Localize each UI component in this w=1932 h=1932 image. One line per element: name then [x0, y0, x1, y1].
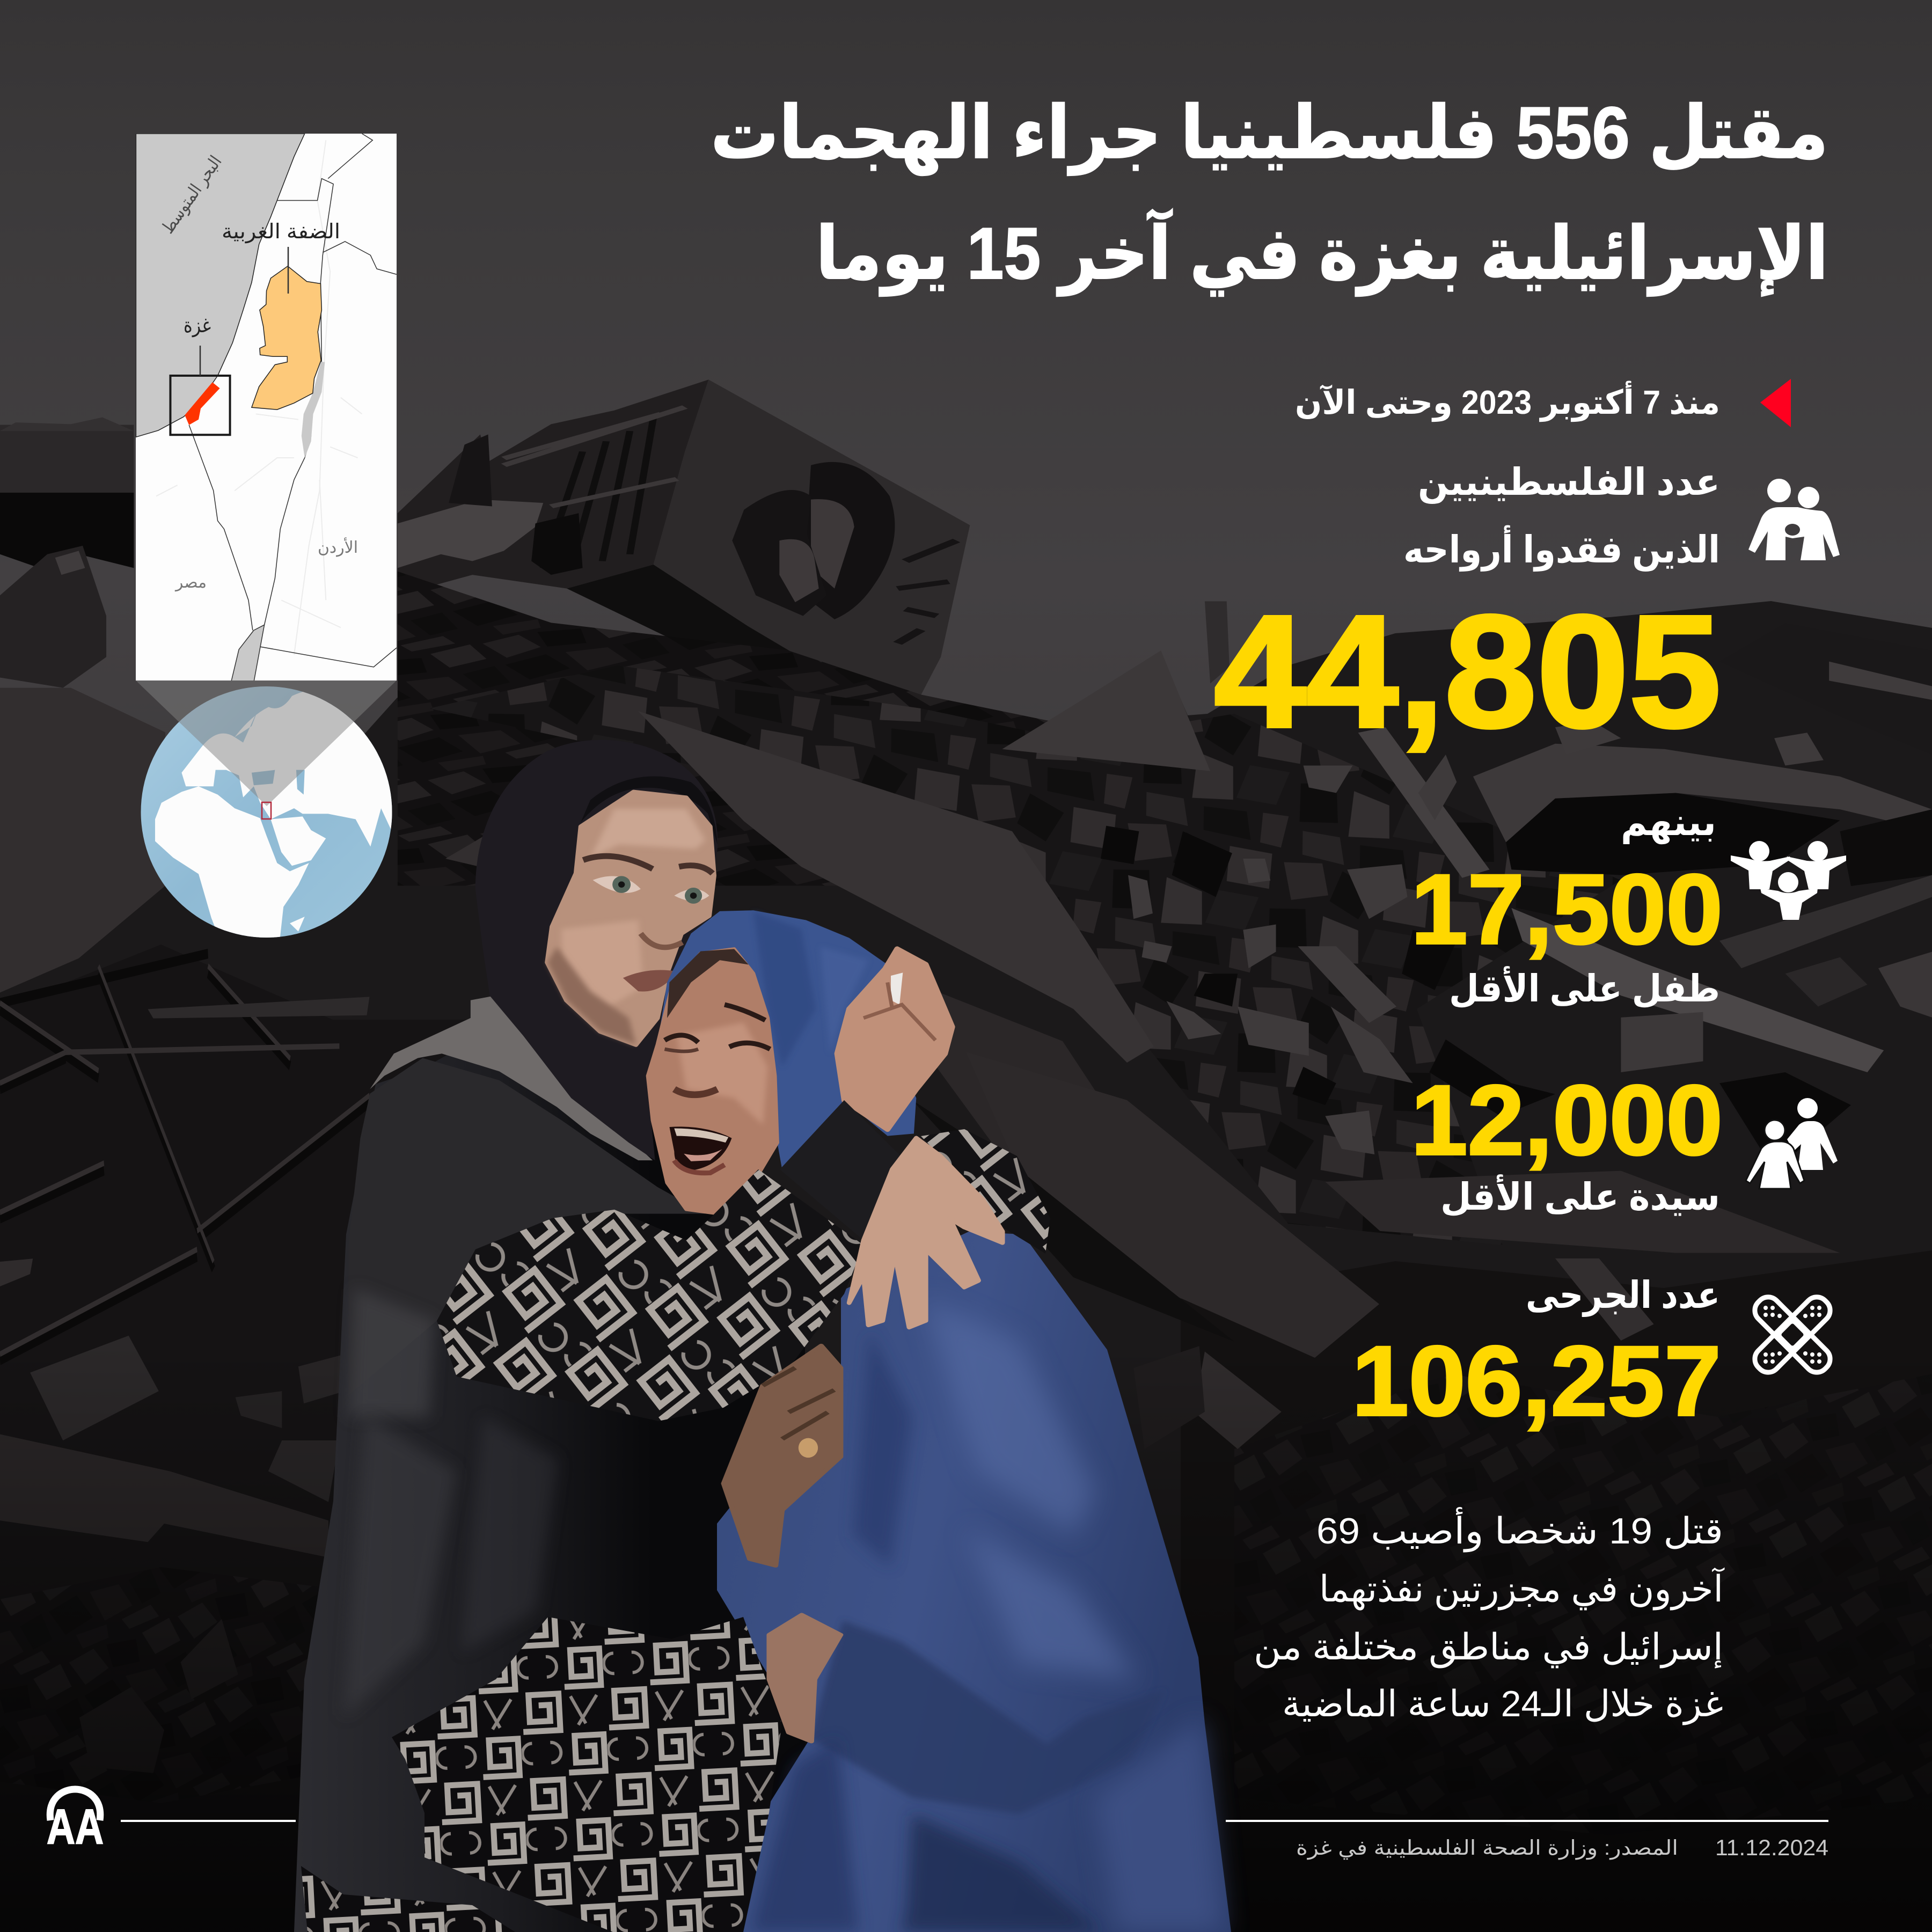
rubble fields	[429, 665, 1621, 1245]
map label: gaza: غزة	[184, 314, 211, 338]
photo: two women embracing	[294, 740, 1231, 1932]
tilted building with mural	[398, 379, 970, 701]
paragraph: last 24 hours: آخرون في مجزرتين نفذتهما	[1319, 1567, 1725, 1611]
locator rectangle	[262, 802, 271, 819]
map inset	[136, 134, 397, 682]
date range text: منذ 7 أكتوبر 2023 وحتى الآن	[1295, 380, 1720, 422]
sleeve pattern upper arm	[437, 1169, 863, 1421]
terrain shading	[156, 140, 362, 655]
paragraph: last 24 hours: غزة خلال الـ24 ساعة الماضية	[1282, 1684, 1723, 1725]
icon: women	[1746, 1098, 1838, 1189]
west bank	[252, 266, 321, 409]
dead sea and gulf of aqaba	[302, 362, 325, 458]
left ruined house	[0, 418, 1234, 992]
hand on shoulder	[849, 1138, 1002, 1327]
source: المصدر: وزارة الصحة الفلسطينية في غزة	[1296, 1837, 1678, 1860]
right woman crying eyes, nose, mouth	[664, 1005, 770, 1173]
hand holding tissue	[837, 949, 952, 1129]
bottom darkening	[0, 1342, 1932, 1932]
mural faces	[732, 462, 956, 643]
hem pattern	[301, 1866, 515, 1932]
title	[711, 92, 1828, 297]
left woman body	[294, 1020, 805, 1932]
footer rule	[121, 1820, 1828, 1822]
cone from globe to map	[136, 680, 397, 806]
collar pattern	[370, 996, 653, 1160]
number: children: 17,500	[1411, 854, 1723, 965]
left woman eyes, brows, nose, lips	[583, 856, 713, 992]
date range marker triangle	[1760, 379, 1791, 427]
sea	[136, 134, 305, 437]
icon: family	[1748, 479, 1840, 560]
lower pocket pattern	[392, 1617, 782, 1932]
globe locator	[136, 680, 397, 945]
ring hand and clasped hand	[723, 1345, 841, 1741]
deaths label: عدد الفلسطينيين	[1418, 461, 1720, 504]
black cuff	[780, 1100, 924, 1240]
icon: children	[1731, 841, 1846, 920]
number: injured: 106,257	[1352, 1326, 1721, 1437]
among them label: بينهم	[1621, 801, 1716, 844]
deaths label	[1403, 461, 1720, 572]
twisted steel frames at left	[0, 954, 369, 1773]
big number: deaths: 44,805	[1214, 582, 1721, 761]
logo: AA: AA	[47, 1799, 104, 1854]
left woman face	[547, 792, 714, 1045]
title: مقتل 556 فلسطينيا جراء الهجمات	[711, 92, 1828, 175]
logo: AA	[47, 1789, 104, 1854]
children label: طفل على الأقل	[1449, 966, 1720, 1009]
women label: سيدة على الأقل	[1440, 1174, 1720, 1218]
borders	[189, 134, 397, 667]
paragraph: last 24 hours: إسرائيل في مناطق مختلفة من	[1254, 1627, 1723, 1668]
number: women: 12,000	[1411, 1065, 1723, 1176]
rubble ground base	[0, 601, 1932, 1932]
injured label: عدد الجرحى	[1526, 1274, 1720, 1317]
black hijab	[475, 740, 718, 1160]
map label: west bank: الضفة الغربية	[222, 221, 340, 244]
right rubble detail	[1002, 601, 1932, 1449]
blue hijab	[657, 910, 916, 1169]
date: 11.12.2024	[1715, 1835, 1828, 1860]
map label: mediterranean: البحر المتوسط	[158, 152, 226, 237]
gaza locator box	[170, 376, 230, 435]
map label: jordan: الأردن	[318, 537, 358, 557]
right woman face	[648, 949, 777, 1214]
map label: egypt: مصر	[174, 574, 207, 591]
gaza strip	[185, 382, 220, 425]
big concrete slabs behind the figures	[638, 711, 1154, 1063]
paragraph: last 24 hours: قتل 19 شخصا وأصيب 69	[1316, 1507, 1723, 1553]
deaths label: الذين فقدوا أرواحه	[1403, 525, 1720, 572]
icon: bandages	[1750, 1292, 1835, 1377]
right blue body	[717, 1232, 1231, 1932]
paragraph: last 24 hours	[1254, 1507, 1725, 1725]
far sleeve pattern	[921, 1129, 1050, 1254]
title: الإسرائيلية بغزة في آخر 15 يوما	[816, 209, 1828, 297]
